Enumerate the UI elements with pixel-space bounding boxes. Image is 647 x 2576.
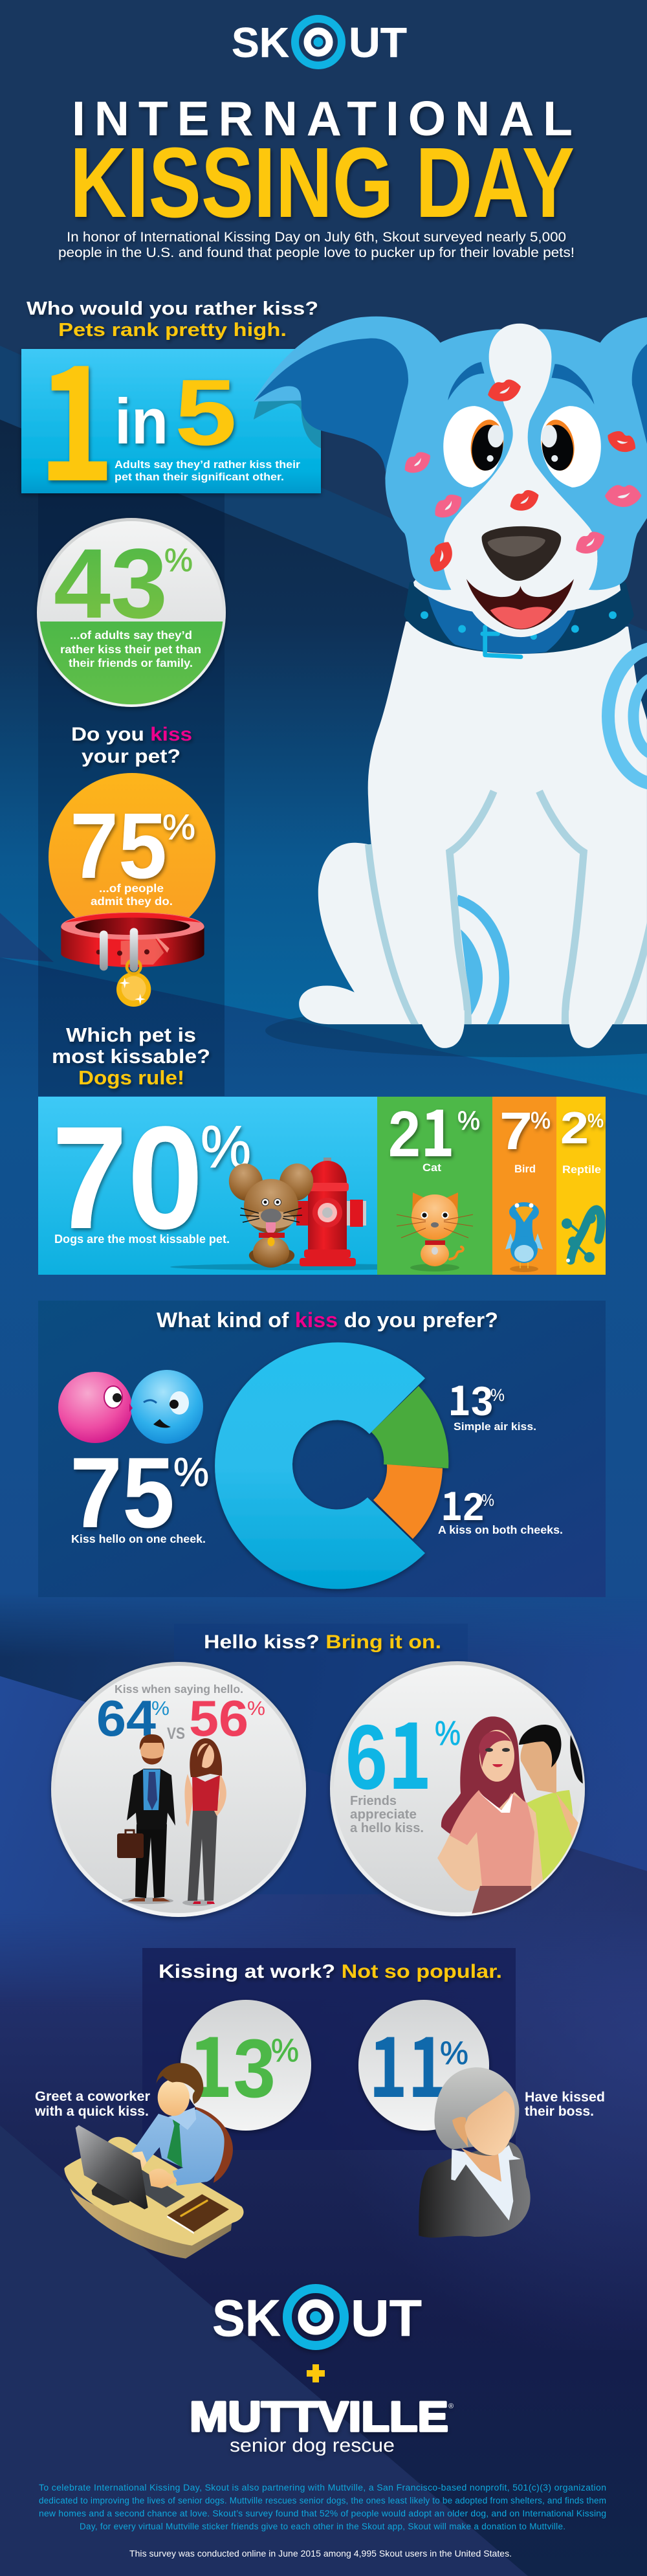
- muzzle and ruff: [413, 560, 621, 637]
- number: %: [162, 807, 195, 847]
- number: %: [164, 542, 193, 578]
- ground shadow: [265, 1016, 647, 1057]
- caption: admit they do.: [91, 895, 173, 908]
- mouth: [466, 579, 574, 629]
- dog illustration: [254, 317, 647, 1057]
- stat: 64 percent: 64: [96, 1690, 156, 1747]
- caption: greet a coworker: with a quick kiss.: [34, 2104, 149, 2119]
- figure: man in suit: [117, 1734, 175, 1904]
- stat: 12 percent: 12: [441, 1475, 484, 1532]
- figure: two women: [437, 1716, 584, 1923]
- heading: What kind of kiss do you prefer?: [157, 1308, 498, 1332]
- circle: kiss when saying hello: Kiss when saying hello.: [115, 1683, 243, 1696]
- caption: pet than their significant other.: [115, 471, 284, 483]
- eyes: [443, 406, 601, 487]
- stat: 64 percent: %: [151, 1697, 170, 1719]
- heading: do you kiss your pet: [71, 724, 192, 767]
- segment: bird: Bird: [514, 1163, 536, 1175]
- heading: which pet is most kissable: Which pet is: [66, 1024, 196, 1046]
- heading: do you kiss your pet: Do you kiss: [71, 724, 192, 745]
- caption: [350, 1794, 424, 1835]
- icon: lizard: [562, 1209, 601, 1262]
- segment: reptile: Reptile: [562, 1163, 601, 1176]
- brows: [448, 362, 595, 405]
- logo: Muttville: [190, 2393, 454, 2456]
- stat: 61 percent: %: [435, 1714, 461, 1753]
- logo: Skout bottom: SK: [212, 2289, 281, 2347]
- panel: what kind of kiss: [38, 1301, 606, 1597]
- circle: 13 percent: %: [271, 2032, 299, 2068]
- stat: 13 percent: Simple air kiss.: [454, 1420, 536, 1433]
- intro text: In honor of International Kissing Day on July 6th, Skout surveyed nearly 5,000: [67, 230, 566, 245]
- icon: red dog collar: [61, 912, 204, 1007]
- icon: cartoon dog and hydrant: [170, 1158, 435, 1270]
- footer text: dedicated to improving the lives of senior dogs. Muttville rescues senior dogs, the ones least likely to be adopted from shelters, and finds them: [39, 2496, 606, 2505]
- icon: blue bird: [505, 1202, 543, 1272]
- panel: most kissable pets: [38, 1081, 606, 1275]
- nose: [482, 526, 561, 581]
- kiss marks: [400, 377, 642, 576]
- logo: Skout top: UT: [349, 19, 407, 66]
- segment: cat: Cat: [422, 1161, 441, 1174]
- segment: dogs: [38, 1095, 435, 1275]
- head and ears: [254, 317, 647, 590]
- circle: kiss when saying hello: [51, 1662, 306, 1917]
- caption: Friends: [350, 1794, 397, 1808]
- segment: bird: [492, 1097, 556, 1275]
- panel: 1 in 5: [21, 297, 321, 526]
- caption: a hello kiss.: [350, 1821, 424, 1835]
- dog body: [299, 622, 647, 1048]
- segment: reptile: %: [587, 1110, 604, 1132]
- stat: 13 percent: %: [490, 1385, 505, 1405]
- survey note: This survey was conducted online in June 2015 among 4,995 Skout users in the United States.: [129, 2548, 512, 2559]
- figure: businesswoman: [419, 2067, 531, 2237]
- caption: rather kiss their pet than: [60, 643, 201, 656]
- segment: cat: %: [457, 1106, 480, 1136]
- panel: kissing at work: [34, 1948, 605, 2150]
- heading: which pet is most kissable: [52, 1024, 210, 1089]
- stat: 75 percent: Kiss hello on one cheek.: [71, 1532, 206, 1545]
- circle: 13 percent: [181, 2000, 311, 2131]
- stat circle: 75%: [49, 773, 215, 940]
- segment: bird: %: [531, 1107, 551, 1134]
- plus sign: [307, 2364, 325, 2382]
- figure: woman in red top: [182, 1738, 226, 1906]
- stat: 13 percent: [448, 1369, 536, 1433]
- number: 75: [70, 794, 167, 898]
- stat: 75 percent: %: [173, 1450, 209, 1495]
- figure: man at desk: [64, 2063, 244, 2259]
- logo: Skout bottom: UT: [351, 2289, 422, 2347]
- segment: dogs: 70: [52, 1095, 203, 1259]
- caption: greet a coworker: [34, 2089, 150, 2119]
- title: [70, 91, 575, 238]
- circle: kiss when saying hello: VS: [167, 1725, 185, 1743]
- stat: 56 percent: %: [247, 1697, 265, 1719]
- chart: donut: [215, 1343, 448, 1589]
- caption: appreciate: [350, 1808, 417, 1822]
- icon: kissing balls: [58, 1370, 203, 1444]
- caption: have kissed their boss: Have kissed: [525, 2090, 605, 2105]
- circle: 11 percent: [358, 2000, 489, 2131]
- segment: reptile: 2: [560, 1103, 589, 1153]
- stat: 12 percent: A kiss on both cheeks.: [438, 1523, 563, 1536]
- segment: cat: 21: [388, 1081, 455, 1175]
- logo: Skout top: [232, 19, 407, 66]
- caption: their friends or family.: [69, 656, 193, 669]
- caption: ...of people: [99, 882, 164, 895]
- stat circle: 43%: [37, 518, 226, 707]
- number: 43: [54, 528, 168, 639]
- segment: bird: 7: [499, 1102, 532, 1161]
- forehead stripe and muzzle: [443, 324, 597, 590]
- caption: [91, 882, 173, 908]
- logo: Muttville: ®: [448, 2402, 454, 2410]
- circle: friends appreciate: [330, 1661, 585, 1923]
- logo: Skout bottom: [212, 2289, 422, 2347]
- stat: 1 in 5: 1: [38, 297, 115, 526]
- segment: dogs: %: [201, 1114, 251, 1180]
- heading: which pet is most kissable: most kissable?: [52, 1045, 210, 1068]
- stat: 12 percent: %: [481, 1490, 494, 1510]
- caption: [60, 629, 201, 669]
- caption: have kissed their boss: [525, 2090, 605, 2119]
- stat: 61 percent: 61: [345, 1682, 432, 1815]
- intro text: [58, 230, 575, 260]
- caption: [115, 458, 300, 483]
- intro text: people in the U.S. and found that people love to pucker up for their lovable pets!: [58, 245, 575, 260]
- segment: reptile: [556, 1097, 606, 1275]
- heading: who would you rather kiss: Who would you rather kiss?: [27, 298, 318, 319]
- logo: Muttville: MUTTVILLE: [190, 2393, 448, 2440]
- heading: Hello kiss? Bring it on.: [204, 1631, 441, 1653]
- body rings: [608, 648, 647, 784]
- stat: 13 percent: 13: [448, 1369, 493, 1428]
- stat: 1 in 5: [38, 297, 237, 526]
- footer text: [39, 2482, 606, 2531]
- circle: 11 percent: %: [440, 2035, 468, 2071]
- circle: 11 percent: 11: [369, 2001, 446, 2121]
- stat: 56 percent: 56: [189, 1690, 248, 1747]
- caption: have kissed their boss: their boss.: [525, 2104, 594, 2119]
- stat: 75 percent: 75: [70, 1437, 175, 1549]
- footer text: Day, for every virtual Muttville sticker friends give to each other in the Skout app, Skout will make a donation to Muttville.: [80, 2522, 565, 2531]
- title: INTERNATIONAL: [72, 91, 573, 146]
- collar: [404, 582, 634, 657]
- stat: 12 percent: [438, 1475, 563, 1536]
- stat: 1 in 5: 5: [175, 360, 237, 465]
- logo: Skout top: SK: [232, 19, 289, 66]
- heading: Kissing at work? Not so popular.: [159, 1961, 502, 1982]
- heading: do you kiss your pet: your pet?: [82, 746, 181, 767]
- footer text: new homes and a second chance at love. Skout’s survey found that 52% of people would adopt an older dog, and on International Kissing: [39, 2508, 606, 2518]
- segment: cat: [377, 1081, 492, 1275]
- stat: 1 in 5: in: [115, 385, 168, 457]
- logo: Muttville: senior dog rescue: [230, 2435, 395, 2456]
- caption: greet a coworker: Greet a coworker: [35, 2089, 150, 2104]
- icon: orange cat: [397, 1193, 473, 1271]
- heading: which pet is most kissable: Dogs rule!: [78, 1066, 184, 1089]
- heading: who would you rather kiss: Pets rank pretty high.: [58, 320, 287, 341]
- footer text: To celebrate International Kissing Day, Skout is also partnering with Muttville, a San Francisco-based nonprofit, 501(c)(3) organization: [39, 2482, 606, 2492]
- panel: hello kiss: [51, 1624, 585, 1923]
- heading: who would you rather kiss: [27, 298, 318, 341]
- caption: ...of adults say they’d: [70, 629, 192, 642]
- circle: 13 percent: 13: [188, 2001, 276, 2121]
- caption: Adults say they’d rather kiss their: [115, 458, 300, 471]
- segment: dogs: Dogs are the most kissable pet.: [54, 1233, 230, 1246]
- dog head: [254, 317, 647, 657]
